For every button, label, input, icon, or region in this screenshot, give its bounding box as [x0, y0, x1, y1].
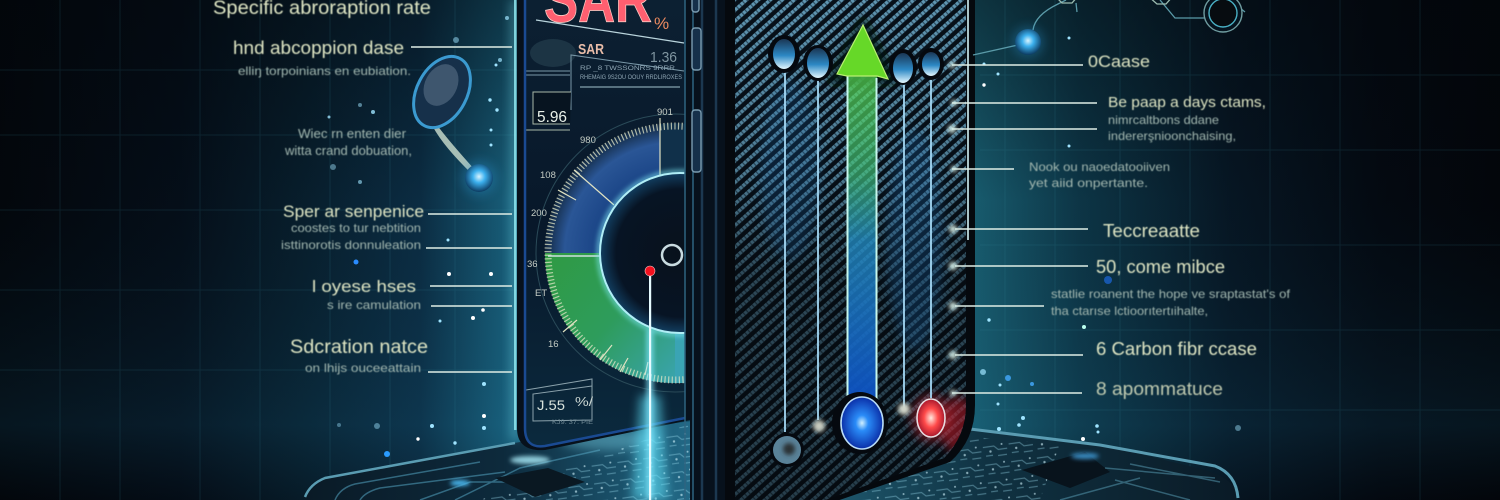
callout: hses: s ire camulation — [327, 298, 421, 312]
gauge — [527, 108, 684, 392]
callout: days: indererşnioonchaising, — [1108, 129, 1236, 143]
small table: RP _8 TWSSONRS 9RRR — [580, 65, 675, 72]
gauge labels: 36 — [527, 259, 538, 270]
callout: sensitivity — [281, 202, 424, 252]
magnifier lens icon — [402, 47, 482, 174]
gauge labels: 200 — [531, 208, 547, 219]
reading box: KJ9. 37. PIE — [552, 419, 594, 426]
left phone edge glow — [510, 0, 520, 440]
callout: statlie: statlie roanent the hope ve sraptastat's of — [1051, 287, 1291, 301]
value box: 5.96 — [537, 109, 567, 126]
left text column — [213, 0, 431, 375]
header divider — [536, 20, 684, 43]
gauge labels: 980 — [580, 135, 596, 146]
green to blue arrow — [826, 14, 900, 406]
callout: absorption dose: elliŋ torpoinians en eubiation. — [238, 64, 411, 78]
phone with SAR screen — [517, 0, 725, 500]
callout: statlie — [1051, 287, 1291, 318]
gauge labels: 901 — [657, 107, 673, 118]
callout: days: Be paap a days ctams, — [1108, 94, 1266, 111]
callout: statlie: tha ctarıse lctioorıtertıihalte, — [1051, 304, 1208, 318]
gauge labels: 108 — [540, 170, 556, 181]
callout: hses: l oyese hses — [312, 277, 416, 296]
callout: note: yet aiid onpertante. — [1029, 176, 1148, 190]
grey sensor ball — [770, 433, 804, 467]
callout: entry text — [284, 127, 412, 158]
gauge labels: 16 — [548, 339, 559, 350]
callout: days: nimrcaltbons ddane — [1108, 113, 1219, 127]
energy beam from gauge — [632, 266, 668, 500]
carbon fibre phone back — [725, 0, 976, 500]
callout: entry text: witta crand dobuation, — [284, 144, 412, 158]
gauge labels: ET — [535, 288, 547, 299]
percent mark: % — [654, 14, 669, 33]
callout: days — [1108, 94, 1266, 143]
callout: sensitivity: coostes to tur nebtition — [291, 221, 421, 235]
gauge hub — [594, 166, 684, 338]
screen border — [525, 0, 685, 446]
sub heading SAR: SAR — [578, 41, 604, 58]
right text column — [1029, 52, 1291, 399]
sensor pins and probe lines — [768, 35, 944, 432]
molecule diagram top right — [973, 0, 1245, 58]
reading box: J.55 — [537, 397, 565, 413]
blue node ball left — [461, 160, 497, 196]
blue sensor bulb — [832, 392, 888, 454]
label: case: 0Caase — [1088, 52, 1150, 71]
small table: RHEMAIG 9S2OU OOUY RRDLIROXES — [580, 74, 683, 81]
callout: absorption dose — [233, 38, 411, 78]
callout: absorption dose: hnd abcoppion dase — [233, 38, 404, 58]
callout: duration: Sdcration natce — [290, 337, 428, 358]
callout: duration — [290, 337, 428, 375]
circuit board platform right — [820, 428, 1238, 500]
red sensor bulb — [911, 394, 951, 442]
phone body — [517, 0, 740, 500]
callout: 50: 50, come mibce — [1096, 257, 1225, 277]
small table — [526, 55, 684, 110]
glowing particles — [328, 16, 1241, 457]
reading box: %/ — [575, 394, 593, 409]
label: carbon fibre case: 6 Carbon fibr ccase — [1096, 339, 1257, 359]
screen — [526, 0, 684, 446]
callout lines left — [411, 47, 512, 372]
reading box — [526, 379, 594, 426]
callout: sensitivity: isttinorotis donnuleation — [281, 238, 421, 252]
sar value: 1.36 — [650, 49, 677, 66]
callout: note — [1029, 160, 1170, 190]
circuit board platform left — [305, 420, 700, 500]
callout: note: Nook ou naoedatooiiven — [1029, 160, 1170, 174]
callout anchor dots right — [948, 62, 957, 396]
speaker icon — [530, 39, 576, 67]
callout: hses — [312, 277, 421, 312]
label: apommatuce: 8 apommatuce — [1096, 379, 1223, 399]
callout: duration: on lhijs ouceeattain — [305, 361, 421, 375]
gauge labels — [527, 107, 673, 350]
side buttons — [692, 0, 701, 172]
small ring — [662, 245, 682, 265]
label: decrease: Teccreaatte — [1103, 221, 1200, 241]
callout: entry text: Wiec rn enten dier — [298, 127, 406, 141]
callout lines right — [952, 65, 1097, 393]
callout: sensitivity: Sper ar senpenice — [283, 202, 424, 221]
value box — [526, 92, 571, 130]
